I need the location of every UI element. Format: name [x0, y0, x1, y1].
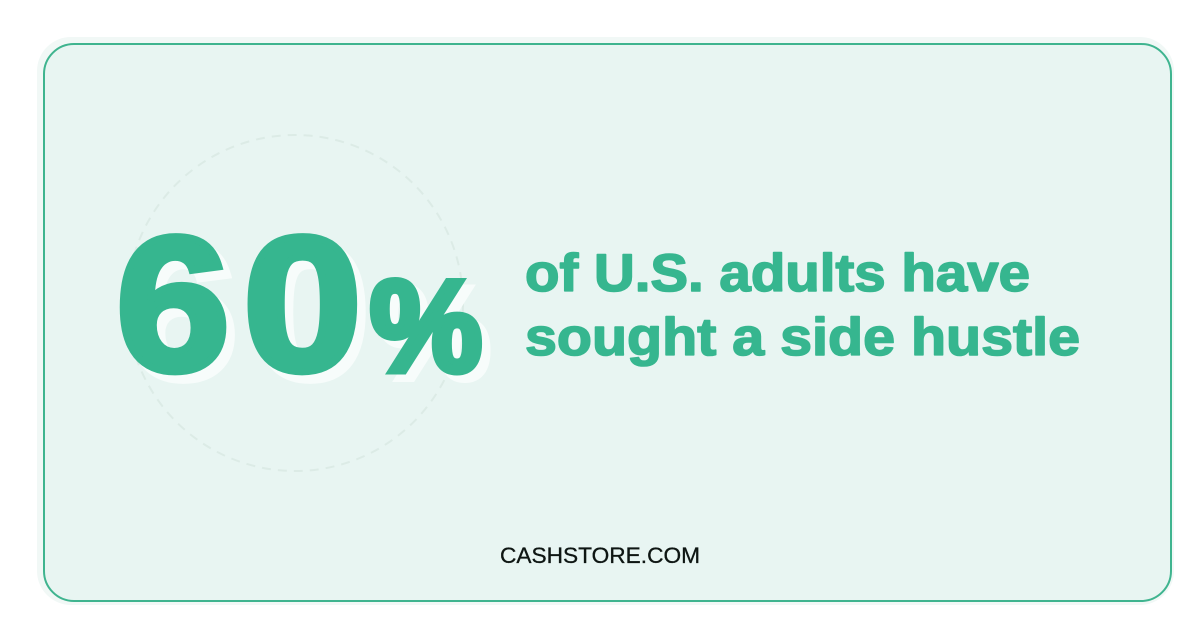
stat number: 6: [116, 198, 230, 411]
stat shadow: %: [378, 260, 490, 406]
stat shadow: [124, 206, 490, 419]
statistic: 60% with white shadow: [116, 198, 490, 419]
stat number: [116, 198, 482, 411]
source: website: CASHSTORE.COM: [500, 543, 700, 568]
decorative dashed circle: [127, 135, 463, 471]
stat number: 0: [243, 198, 362, 411]
stat shadow: 6: [124, 206, 238, 419]
stat number: %: [370, 253, 482, 399]
description text: of U.S. adults have: [525, 244, 1030, 303]
stat shadow: 0: [251, 206, 370, 419]
description text: sought a side hustle: [525, 308, 1080, 367]
description text: [525, 244, 1080, 367]
